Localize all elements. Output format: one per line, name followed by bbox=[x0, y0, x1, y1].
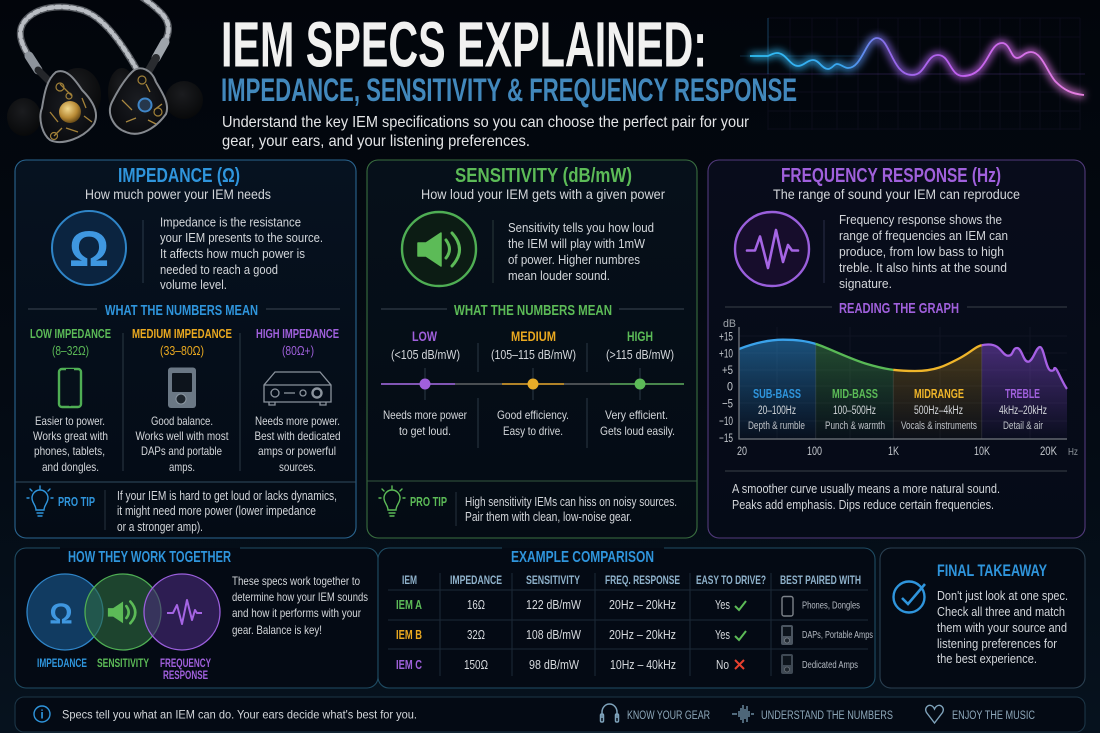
x axis labels: 100 bbox=[807, 444, 822, 458]
heading: sensitivity: SENSITIVITY (dB/mW) bbox=[455, 165, 632, 187]
venn labels: SENSITIVITY bbox=[97, 656, 149, 670]
band label: treble: 4kHz–20kHz bbox=[999, 405, 1047, 417]
right earpiece bbox=[108, 68, 203, 134]
takeaway text: Don't just look at one spec. bbox=[937, 589, 1068, 603]
band label: treble: Detail & air bbox=[1003, 420, 1043, 432]
takeaway text bbox=[937, 589, 1068, 666]
row: IEM B: 20Hz – 20kHz bbox=[609, 627, 676, 642]
description: impedance: your IEM presents to the source. bbox=[160, 231, 323, 245]
description: sensitivity: Sensitivity tells you how loud bbox=[508, 221, 654, 235]
footer bar bbox=[15, 697, 1085, 732]
icon: info bbox=[34, 706, 50, 722]
description: impedance: Impedance is the resistance bbox=[160, 216, 301, 230]
row: IEM C: No bbox=[716, 657, 729, 672]
understand the numbers bbox=[732, 705, 893, 723]
icon: waveform bbox=[735, 212, 809, 286]
panel: how they work together bbox=[15, 548, 378, 688]
column: high impedance: sources. bbox=[279, 460, 316, 474]
column: medium impedance: (33–80Ω) bbox=[160, 343, 204, 358]
description: impedance: volume level. bbox=[160, 278, 227, 292]
column: low impedance: and dongles. bbox=[42, 460, 99, 474]
venn labels: IMPEDANCE bbox=[37, 656, 87, 670]
column: high sensitivity bbox=[600, 328, 675, 438]
band label: mid-bass: Punch & warmth bbox=[825, 420, 885, 432]
graph note: A smoother curve usually means a more natural sound. bbox=[732, 481, 1000, 496]
cable loop bbox=[20, 0, 168, 84]
x axis labels: 10K bbox=[974, 444, 990, 458]
y axis labels: 0 bbox=[727, 380, 733, 394]
heading: HOW THEY WORK TOGETHER bbox=[68, 549, 231, 566]
pro tip: impedance: PRO TIP bbox=[58, 494, 95, 509]
know your gear bbox=[600, 704, 710, 722]
description: sensitivity: of power. Higher numbres bbox=[508, 253, 640, 267]
row: IEM C: 150Ω bbox=[464, 657, 488, 672]
heading: frequency response: FREQUENCY RESPONSE (Hz) bbox=[781, 165, 1001, 187]
intro text: Understand the key IEM specifications so you can choose the perfect pair for your bbox=[222, 114, 750, 131]
row: IEM A: Phones, Dongles bbox=[802, 600, 860, 612]
pro tip: sensitivity: PRO TIP bbox=[410, 494, 447, 509]
title: IEM SPECS EXPLAINED: bbox=[221, 8, 707, 80]
heading: FINAL TAKEAWAY bbox=[937, 561, 1047, 580]
y axis labels: −10 bbox=[719, 414, 733, 428]
column: low impedance: LOW IMPEDANCE bbox=[30, 326, 111, 341]
panel: frequency response bbox=[708, 160, 1085, 538]
description: gear. Balance is key! bbox=[232, 623, 322, 637]
row: IEM B: 108 dB/mW bbox=[526, 627, 582, 642]
description: sensitivity: the IEM will play with 1mW bbox=[508, 237, 645, 251]
table header: FREQ. RESPONSE bbox=[605, 575, 680, 587]
band label: sub-bass: SUB-BASS bbox=[753, 386, 801, 401]
row: IEM C: 10Hz – 40kHz bbox=[610, 657, 676, 672]
intro text: gear, your ears, and your listening preferences. bbox=[222, 133, 530, 150]
column: medium sensitivity: Good efficiency. bbox=[497, 408, 569, 422]
pro tip: impedance: it might need more power (lower impedance bbox=[117, 504, 316, 518]
sensitivity scale bbox=[381, 368, 684, 400]
x axis labels: Hz bbox=[1068, 446, 1078, 458]
column: low impedance: Works great with bbox=[33, 429, 108, 443]
column: low impedance: phones, tablets, bbox=[34, 444, 105, 458]
pro tip: impedance: If your IEM is hard to get loud or lacks dynamics, bbox=[117, 489, 337, 503]
venn diagram bbox=[27, 574, 220, 650]
band label: treble: TREBLE bbox=[1005, 386, 1040, 401]
description: and how it performs with your bbox=[232, 606, 361, 620]
icon: check circle bbox=[894, 582, 925, 612]
column: high sensitivity: (>115 dB/mW) bbox=[606, 348, 674, 362]
column: medium impedance bbox=[132, 326, 232, 474]
intro text bbox=[222, 114, 750, 150]
column: high sensitivity: Gets loud easily. bbox=[600, 424, 675, 438]
table header: SENSITIVITY bbox=[526, 575, 580, 587]
y axis labels bbox=[719, 318, 736, 445]
panel: final takeaway bbox=[880, 548, 1085, 688]
column: low sensitivity: Needs more power bbox=[383, 408, 467, 422]
description: frequency response bbox=[839, 213, 1008, 291]
subheading: frequency response: The range of sound your IEM can reproduce bbox=[773, 187, 1020, 202]
subtitle: IMPEDANCE, SENSITIVITY & FREQUENCY RESPONSE bbox=[221, 72, 797, 108]
pro tip: impedance: or a stronger amp). bbox=[117, 520, 203, 534]
pro tip: sensitivity: Pair them with clean, low-noise gear. bbox=[465, 510, 632, 524]
column: low sensitivity: LOW bbox=[412, 328, 438, 344]
icon: omega bbox=[52, 211, 126, 285]
icon: info: i bbox=[40, 708, 44, 722]
icon: DAP bbox=[168, 368, 196, 408]
band label: midrange bbox=[901, 386, 977, 432]
x axis labels: 1K bbox=[888, 444, 899, 458]
column: low impedance bbox=[30, 326, 111, 474]
pro tip: impedance bbox=[27, 486, 337, 534]
column: high impedance: Best with dedicated bbox=[254, 429, 340, 443]
column: low sensitivity: to get loud. bbox=[399, 424, 451, 438]
column: low impedance: Easier to power. bbox=[35, 414, 105, 428]
band label: mid-bass bbox=[825, 386, 885, 432]
panel: impedance bbox=[15, 160, 356, 538]
row: IEM B: DAPs, Portable Amps bbox=[802, 630, 873, 641]
row: IEM C: 98 dB/mW bbox=[529, 657, 580, 672]
column: medium impedance: Works well with most bbox=[136, 429, 229, 443]
venn labels bbox=[37, 656, 211, 682]
column: medium sensitivity: Easy to drive. bbox=[503, 424, 563, 438]
row: IEM B bbox=[396, 625, 873, 645]
y axis labels: +10 bbox=[719, 346, 733, 360]
venn circle: impedance bbox=[27, 574, 103, 650]
column: high sensitivity: HIGH bbox=[627, 328, 653, 344]
column: low impedance: (8–32Ω) bbox=[52, 343, 89, 358]
table header: IEM bbox=[402, 575, 417, 587]
enjoy the music: ENJOY THE MUSIC bbox=[952, 710, 1035, 722]
row: IEM A: 122 dB/mW bbox=[526, 597, 582, 612]
band label: sub-bass: 20–100Hz bbox=[758, 405, 796, 417]
venn circle: sensitivity bbox=[85, 574, 161, 650]
pro tip: sensitivity: High sensitivity IEMs can hiss on noisy sources. bbox=[465, 495, 677, 509]
understand the numbers: UNDERSTAND THE NUMBERS bbox=[761, 710, 893, 722]
table header bbox=[402, 575, 861, 587]
column: high impedance: amps or powerful bbox=[258, 444, 336, 458]
comparison table bbox=[388, 573, 873, 676]
header frequency wave bbox=[740, 18, 1085, 130]
row: IEM C: Dedicated Amps bbox=[802, 660, 858, 671]
panel: sensitivity bbox=[367, 160, 697, 538]
description: sensitivity bbox=[508, 221, 654, 283]
icon: light bulb bbox=[379, 486, 405, 516]
heading: EXAMPLE COMPARISON bbox=[511, 549, 654, 566]
row: IEM A: Yes bbox=[715, 597, 730, 612]
takeaway text: them with your source and bbox=[937, 621, 1067, 635]
takeaway text: the best experience. bbox=[937, 652, 1037, 666]
column: high impedance bbox=[254, 326, 340, 474]
column: medium sensitivity: MEDIUM bbox=[511, 328, 556, 344]
table header: IMPEDANCE bbox=[450, 575, 502, 587]
enjoy the music bbox=[926, 705, 1035, 723]
left earpiece bbox=[7, 68, 101, 142]
table header: EASY TO DRIVE? bbox=[696, 575, 766, 587]
icon: phone bbox=[59, 369, 81, 407]
venn circle: frequency response bbox=[144, 574, 220, 650]
description: frequency response: Frequency response shows the bbox=[839, 213, 1002, 227]
description: frequency response: treble. It also hints at the sound bbox=[839, 261, 1007, 275]
pro tip: sensitivity bbox=[379, 486, 677, 526]
y axis labels: dB bbox=[723, 318, 736, 330]
column: low sensitivity: (<105 dB/mW) bbox=[391, 348, 460, 362]
band label: mid-bass: 100–500Hz bbox=[833, 405, 876, 417]
row: IEM A: 20Hz – 20kHz bbox=[609, 597, 676, 612]
band label: sub-bass bbox=[748, 386, 805, 432]
venn labels: RESPONSE bbox=[163, 668, 208, 682]
description: impedance: It affects how much power is bbox=[160, 247, 305, 261]
column: medium sensitivity bbox=[491, 328, 576, 438]
panel: example comparison bbox=[378, 548, 875, 688]
description: impedance bbox=[160, 216, 323, 292]
column: medium sensitivity: (105–115 dB/mW) bbox=[491, 348, 576, 362]
description: sensitivity: mean louder sound. bbox=[508, 269, 610, 283]
x axis labels bbox=[737, 444, 1078, 458]
y axis labels: −15 bbox=[719, 431, 733, 445]
row: IEM B: IEM B bbox=[396, 627, 422, 642]
description: frequency response: signature. bbox=[839, 277, 892, 291]
icon: amplifier bbox=[264, 372, 331, 405]
column: medium impedance: MEDIUM IMPEDANCE bbox=[132, 326, 232, 341]
column: high impedance: Needs more power. bbox=[255, 414, 340, 428]
row: IEM A: 16Ω bbox=[467, 597, 485, 612]
description: frequency response: range of frequencies an IEM can bbox=[839, 229, 1008, 243]
band label: midrange: 500Hz–4kHz bbox=[914, 405, 963, 417]
graph note: Peaks add emphasis. Dips reduce certain frequencies. bbox=[732, 497, 994, 512]
band label: mid-bass: MID-BASS bbox=[832, 386, 878, 401]
description: determine how your IEM sounds bbox=[232, 590, 368, 604]
column: medium impedance: DAPs and portable bbox=[141, 444, 222, 458]
band label: midrange: Vocals & instruments bbox=[901, 420, 977, 432]
band label: midrange: MIDRANGE bbox=[914, 386, 964, 401]
band label: sub-bass: Depth & rumble bbox=[748, 420, 805, 432]
column: low sensitivity bbox=[383, 328, 467, 438]
column: high impedance: HIGH IMPEDANCE bbox=[256, 326, 339, 341]
y axis labels: −5 bbox=[722, 396, 733, 410]
venn circle: impedance: Ω bbox=[49, 598, 73, 630]
footer message: Specs tell you what an IEM can do. Your ears decide what's best for you. bbox=[62, 708, 417, 722]
column: medium impedance: amps. bbox=[169, 460, 195, 474]
section heading: WHAT THE NUMBERS MEAN bbox=[454, 302, 612, 319]
column: medium impedance: Good balance. bbox=[151, 414, 213, 428]
y axis labels: +5 bbox=[722, 363, 733, 377]
takeaway text: Check all three and match bbox=[937, 605, 1065, 619]
row: IEM C: IEM C bbox=[396, 657, 422, 672]
description bbox=[232, 574, 368, 637]
description: These specs work together to bbox=[232, 574, 360, 588]
table header: BEST PAIRED WITH bbox=[780, 575, 861, 587]
column: high impedance: (80Ω+) bbox=[282, 343, 314, 358]
section heading: READING THE GRAPH bbox=[839, 300, 959, 317]
band label: treble bbox=[999, 386, 1047, 432]
frequency response chart bbox=[719, 318, 1078, 458]
y axis labels: +15 bbox=[719, 330, 733, 344]
row: IEM C bbox=[396, 654, 858, 674]
takeaway text: listening preferences for bbox=[937, 637, 1057, 651]
column: high sensitivity: Very efficient. bbox=[605, 408, 668, 422]
description: frequency response: produce, from low bass to high bbox=[839, 245, 1004, 259]
icon: light bulb bbox=[27, 486, 53, 516]
row: IEM B: Yes bbox=[715, 627, 730, 642]
venn labels: FREQUENCY bbox=[160, 656, 211, 670]
icon: speaker bbox=[402, 212, 476, 286]
coloured frequency bands bbox=[739, 340, 1067, 439]
row: IEM A bbox=[396, 596, 860, 616]
header image: in-ear monitors bbox=[7, 0, 203, 142]
icon: omega: Ω bbox=[69, 221, 109, 277]
heading: impedance: IMPEDANCE (Ω) bbox=[118, 165, 240, 187]
x axis labels: 20 bbox=[737, 444, 747, 458]
subheading: sensitivity: How loud your IEM gets with a given power bbox=[421, 187, 665, 202]
x axis labels: 20K bbox=[1040, 444, 1057, 458]
subheading: impedance: How much power your IEM needs bbox=[85, 187, 271, 202]
row: IEM B: 32Ω bbox=[467, 627, 485, 642]
description: impedance: needed to reach a good bbox=[160, 263, 278, 277]
section heading: WHAT THE NUMBERS MEAN bbox=[105, 302, 258, 319]
graph note bbox=[732, 481, 1000, 512]
know your gear: KNOW YOUR GEAR bbox=[627, 710, 710, 722]
row: IEM A: IEM A bbox=[396, 597, 422, 612]
